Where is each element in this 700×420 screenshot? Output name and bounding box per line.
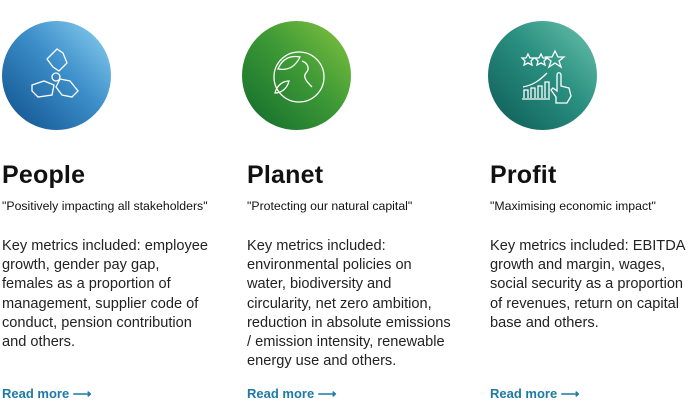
text: planet metrics: environmental policies on [247,257,412,273]
text: planet metrics: water, biodiversity and [247,276,391,292]
icon: planet globe circle [242,21,351,130]
text: planet metrics: energy use and others. [247,353,396,369]
quote: people: "Positively impacting all stakeholders" [2,199,208,213]
text: people metrics: females as a proportion of [2,276,171,292]
text: profit metrics: base and others. [490,315,599,331]
panel: planet [242,21,451,401]
link: read more people: Read more ⟶ [2,386,91,401]
panel: profit [488,21,686,401]
heading: profit: Profit [490,161,556,189]
text: people metrics: conduct, pension contribution [2,315,192,331]
icon: people hands circle [2,21,111,130]
text: people metrics: and others. [2,334,75,350]
text: people metrics: growth, gender pay gap, [2,257,159,273]
text: planet metrics [247,238,451,369]
heading: planet: Planet [247,161,323,189]
text: profit metrics: growth and margin, wages, [490,257,665,273]
text: profit metrics: social security as a proportion [490,276,683,292]
panel: people [2,21,208,401]
link: read more profit: Read more ⟶ [490,386,579,401]
text: planet metrics: Key metrics included: [247,238,386,254]
link: read more planet: Read more ⟶ [247,386,336,401]
heading: people: People [2,161,85,189]
icon: profit chart circle [488,21,597,130]
text: profit metrics: of revenues, return on capital [490,296,679,312]
text: profit metrics: Key metrics included: EBITDA [490,238,685,254]
text: planet metrics: / emission intensity, renewable [247,334,445,350]
quote: profit: "Maximising economic impact" [490,199,656,213]
text: planet metrics: reduction in absolute emissions [247,315,451,331]
text: people metrics [2,238,208,350]
text: planet metrics: circularity, net zero ambition, [247,296,432,312]
quote: planet: "Protecting our natural capital" [247,199,412,213]
text: profit metrics [490,238,686,331]
text: people metrics: management, supplier code of [2,296,198,312]
text: people metrics: Key metrics included: employee [2,238,208,254]
